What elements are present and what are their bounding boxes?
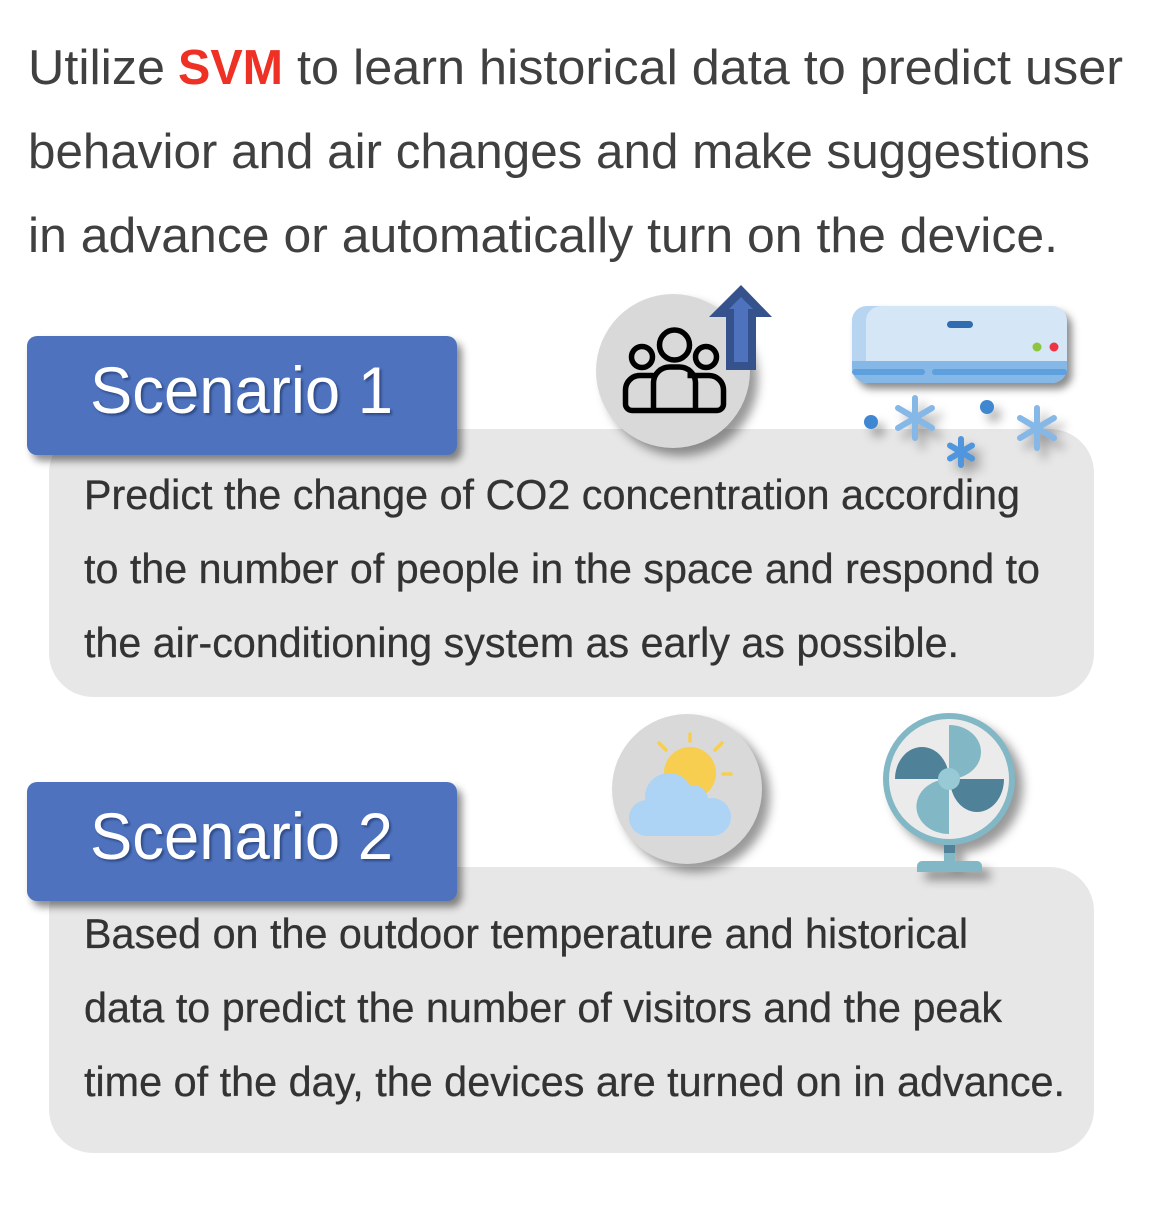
heading: in advance or automatically turn on the device. xyxy=(28,209,1058,263)
label: scenario 1: Scenario 1 xyxy=(90,353,393,427)
heading: behavior and air changes and make suggestions xyxy=(28,125,1090,179)
label: scenario 2 xyxy=(27,782,457,901)
heading: to learn historical data to predict user xyxy=(297,41,1123,95)
label: scenario 2: Scenario 2 xyxy=(90,799,393,873)
heading: Utilize xyxy=(28,41,165,95)
panel: scenario 2 description: time of the day, the devices are turned on in advance. xyxy=(84,1058,1065,1105)
icon: air conditioner with snowflakes xyxy=(852,306,1067,465)
icon: sun and cloud xyxy=(612,714,762,864)
heading: SVM xyxy=(178,41,283,95)
panel: scenario 1 description: Predict the change of CO2 concentration according xyxy=(84,471,1020,518)
label: scenario 1 xyxy=(27,336,457,455)
icon: electric fan xyxy=(886,716,1012,872)
heading xyxy=(28,41,1123,263)
panel: scenario 2 description: data to predict the number of visitors and the peak xyxy=(84,984,1003,1031)
panel: scenario 1 description: to the number of people in the space and respond to xyxy=(84,545,1040,592)
panel: scenario 2 description: Based on the outdoor temperature and historical xyxy=(84,910,968,957)
panel: scenario 2 description xyxy=(49,867,1094,1153)
icon: people with up arrow xyxy=(596,285,772,448)
panel: scenario 1 description xyxy=(49,429,1094,697)
panel: scenario 1 description: the air-conditioning system as early as possible. xyxy=(84,619,959,666)
